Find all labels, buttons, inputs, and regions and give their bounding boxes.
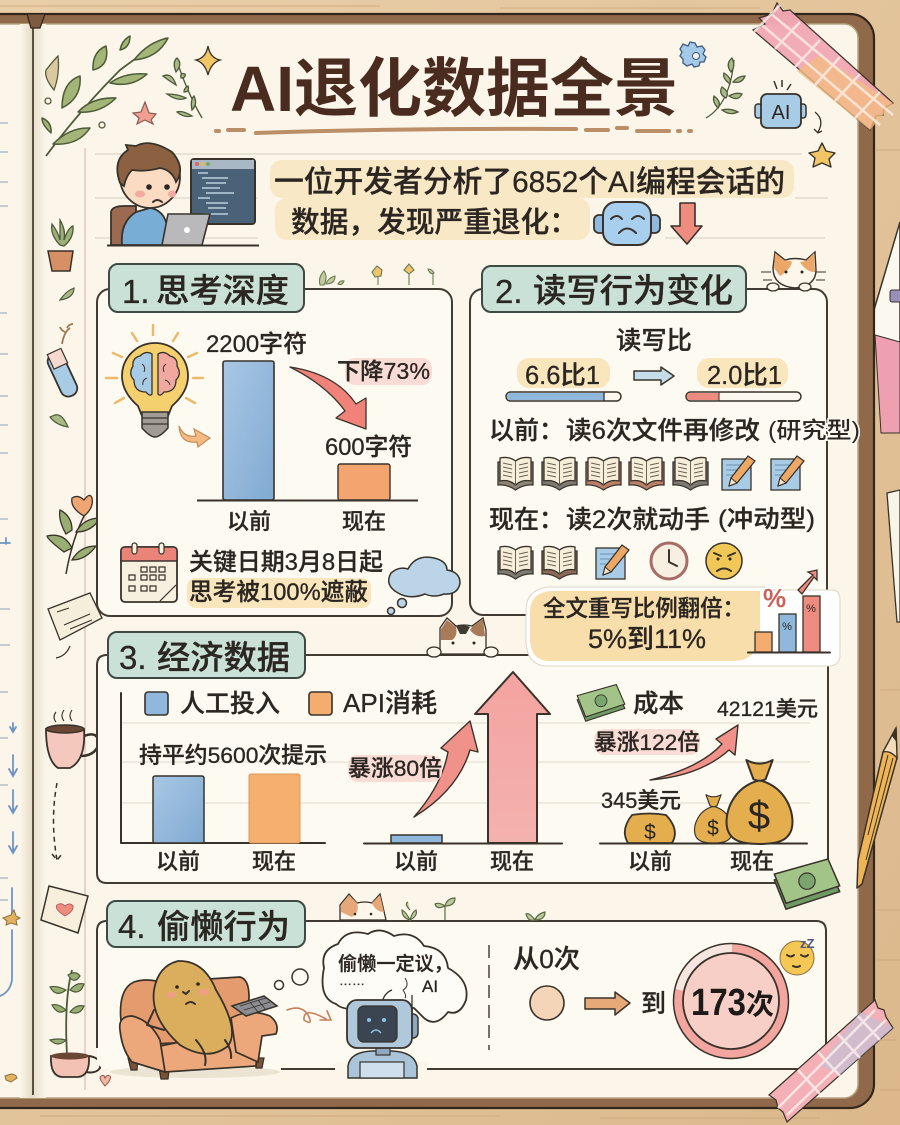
icon: banknotes — [577, 685, 625, 721]
section 4 tab: 4. — [118, 908, 146, 945]
icon: AI chip badge: AI — [772, 102, 790, 124]
panel 2: read write change — [470, 252, 860, 615]
section 3 tab — [108, 632, 305, 678]
callout: down 73%: 下降73% — [337, 358, 430, 384]
text: now impulsive type — [489, 506, 815, 534]
section 4 tab — [107, 901, 305, 947]
subtitle text: 数据，发现严重退化： — [291, 206, 578, 239]
chart: cost: 现在 — [730, 849, 774, 874]
callout: full rewrite ratio: 全文重写比例翻倍： — [543, 595, 745, 621]
chart: human input vs api: 持平约5600次提示 — [139, 743, 327, 768]
ring: 173 times: 次 — [746, 989, 774, 1020]
desk papers on the right — [874, 222, 900, 622]
text: before research type: (研究型) — [768, 417, 860, 443]
icons: five books and two notes — [498, 456, 804, 490]
section 2 tab: 读写行为变化 — [533, 272, 733, 309]
subtitle text: 一位开发者分析了6852个AI编程会话的 — [274, 166, 785, 199]
chart: API surge: 暴涨80倍 — [348, 756, 442, 781]
section 4 tab: 偷懒行为 — [157, 908, 290, 945]
ruled lines and margin — [0, 123, 828, 1090]
bar chart: thinking characters — [197, 331, 418, 534]
subtitle highlight — [270, 160, 794, 240]
bar chart: thinking characters: 现在 — [342, 509, 386, 534]
chart: cost: 以前 — [628, 849, 672, 874]
thought cloud with definition — [322, 930, 467, 1022]
subtitle text — [274, 166, 785, 239]
text: key date: 思考被100%遮蔽 — [189, 579, 368, 606]
arrow: zero to 173 — [585, 992, 630, 1015]
section 1 tab: 思考深度 — [156, 272, 289, 309]
mini bar chart: % — [806, 603, 816, 615]
mini bar chart — [748, 570, 830, 652]
thought cloud with definition: 偷懒一定议， — [338, 953, 453, 975]
icon: banknotes lower right — [774, 859, 840, 909]
dashed doodle arrow — [52, 783, 62, 860]
icon: calendar — [121, 543, 177, 602]
chart: human input vs api: 现在 — [252, 849, 296, 874]
section 2 tab: 2. — [495, 273, 523, 310]
ring: 173 times: 173 — [691, 982, 746, 1024]
sprouts above panel 1 — [320, 264, 434, 285]
icon: gold sparkle — [196, 46, 220, 75]
icon: brain light bulb — [106, 325, 203, 437]
icons: two books, note, clock, face — [498, 543, 742, 579]
washi tape bottom — [769, 1000, 893, 1122]
text: now impulsive type: 现在： — [489, 506, 564, 534]
text: now impulsive type: (冲动型) — [718, 506, 815, 533]
panel 3: economic data — [97, 618, 828, 883]
icon: small leaf sprig — [163, 58, 202, 118]
chart: cost: 成本 — [633, 690, 684, 718]
dashed divider — [488, 945, 490, 1050]
section 1 tab — [109, 264, 304, 312]
icon: sleeping face — [780, 936, 814, 975]
thought bubble dots — [274, 969, 308, 990]
section 3 tab: 3. — [119, 639, 147, 676]
title: AI退化数据全景 — [230, 53, 678, 125]
arrow: squiggle — [287, 1008, 331, 1022]
chart: cost: 暴涨122倍 — [594, 730, 700, 755]
icon: red down arrow — [671, 203, 702, 244]
text: before research type: 读6次文件再修改 — [566, 417, 760, 445]
arrow: ratio change — [634, 367, 674, 385]
icon: calico cat — [427, 618, 498, 657]
section 1 tab: 1. — [122, 273, 150, 310]
ratio before — [506, 358, 621, 401]
text: to: 到 — [641, 990, 666, 1018]
chart: cost: $ — [644, 821, 656, 844]
ratio after — [686, 358, 801, 401]
ratio after: 2.0比1 — [707, 362, 782, 390]
text: key date: 关键日期3月8日起 — [189, 549, 383, 576]
icon: small heart — [100, 1075, 110, 1086]
notebook spine — [20, 14, 46, 1098]
sprouts above panel 4 — [402, 898, 545, 920]
left page blue doodles — [0, 538, 20, 1082]
icon: coffee cup — [46, 710, 98, 768]
icon: potted plant — [48, 220, 73, 271]
ratio before: 6.6比1 — [525, 362, 600, 390]
illustration: developer at laptop — [107, 143, 259, 246]
text: key date — [187, 549, 383, 608]
illustration: couch potato — [110, 961, 280, 1079]
icon: sleeping face: zZ — [800, 936, 814, 951]
chart: API surge — [348, 672, 562, 874]
bar chart: thinking characters: 2200字符 — [206, 331, 307, 358]
arrow: decline — [290, 367, 366, 429]
text: before research type: 以前： — [489, 417, 564, 445]
section 3 tab: 经济数据 — [157, 639, 290, 676]
heading: read write ratio: 读写比 — [616, 327, 692, 355]
ring: 173 times — [674, 944, 788, 1058]
panel 4: lazy behaviour — [97, 894, 826, 1079]
chart: cost: $ — [748, 794, 770, 838]
chart: human input vs api: 以前 — [156, 849, 200, 874]
arrow: bulb to bar — [179, 426, 210, 447]
icon: pink star — [133, 102, 156, 124]
icon: large leaf branch — [42, 36, 168, 156]
chart: API surge: 现在 — [490, 849, 534, 874]
icon: plant in cup — [50, 970, 100, 1077]
chart: cost: $ — [707, 817, 719, 840]
icon: orange flower plant — [47, 495, 100, 574]
left margin doodles — [45, 288, 80, 427]
chart: cost — [577, 685, 818, 874]
chart: human input vs api: 人工投入 — [180, 690, 280, 718]
callout: full rewrite ratio — [526, 570, 840, 666]
chart: human input vs api — [121, 688, 437, 874]
callout: full rewrite ratio: 5%到11% — [588, 624, 706, 654]
chart: cost: 42121美元 — [717, 698, 818, 721]
icon: torn note — [48, 593, 102, 658]
illustration: sad robot — [347, 990, 418, 1078]
bar chart: thinking characters: 600字符 — [325, 434, 412, 461]
icon: sad robot face — [594, 202, 660, 245]
thought cloud with definition: …… — [339, 973, 365, 988]
icon: cat behind panel 4 — [340, 894, 386, 920]
title underline — [216, 128, 691, 133]
chart: cost: 345美元 — [601, 788, 681, 813]
text: from zero: 从0次 — [513, 944, 580, 974]
chart: human input vs api: API消耗 — [343, 688, 437, 718]
pencil — [857, 728, 897, 888]
icon: blue flower — [680, 42, 706, 67]
text: now impulsive type: 读2次就动手 — [566, 506, 710, 534]
text: before research type — [489, 417, 860, 445]
icon: AI chip badge — [755, 80, 822, 133]
icon: heart envelope — [41, 886, 88, 933]
icon: right leaf sprig — [706, 58, 745, 118]
chart: API surge: 以前 — [394, 849, 438, 874]
mini bar chart: % — [782, 621, 792, 633]
icon: orange cat — [761, 252, 826, 291]
mini bar chart: % — [763, 583, 786, 613]
section 2 tab — [482, 266, 746, 312]
icon: gold star — [809, 143, 835, 167]
icon: thought cloud — [388, 557, 460, 614]
washi tape top — [753, 3, 893, 130]
panel 1: thinking depth — [97, 264, 460, 616]
icon: empty circle — [530, 986, 564, 1020]
thought cloud with definition: AI — [422, 977, 438, 996]
bar chart: thinking characters: 以前 — [227, 509, 271, 534]
